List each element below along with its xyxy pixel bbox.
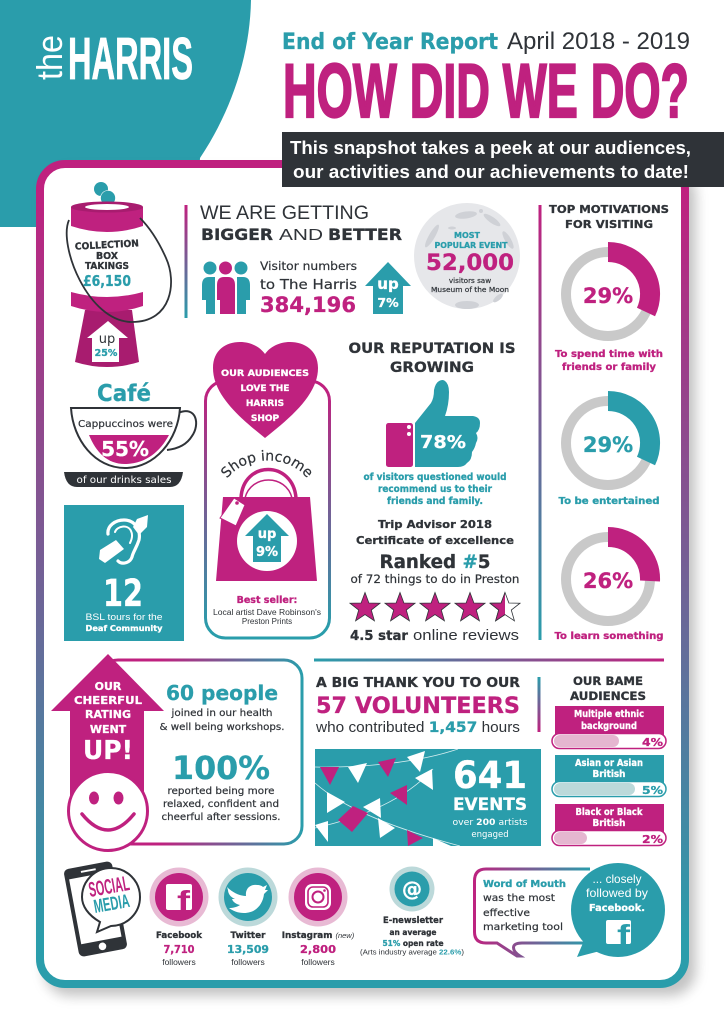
arrow up 7%: up [377, 275, 399, 293]
e-newsletter stat [360, 866, 464, 956]
reputation text [364, 472, 506, 507]
workshops text: cheerful after sessions. [162, 812, 280, 823]
box label: COLLECTION [75, 238, 139, 253]
facebook stat: 7,710 [164, 943, 195, 956]
volunteers text: 57 VOLUNTEERS [316, 694, 520, 719]
moon: most popular event: 52,000 [426, 251, 514, 276]
heading [549, 203, 669, 231]
online reviews [350, 627, 519, 644]
donut 26% learn: 26% [583, 569, 633, 593]
intro banner [282, 132, 724, 187]
panel: cheerful rating [51, 654, 302, 850]
bar: asian: 5% [642, 784, 663, 797]
bar: black: 2% [642, 833, 663, 846]
box label [75, 238, 139, 290]
heading: FOR VISITING [565, 218, 653, 231]
donut 26% learn [554, 537, 664, 642]
callout: facebook: ... closely [592, 872, 642, 886]
events text: 641 [453, 754, 527, 797]
BSL panel: BSL tours for the [86, 612, 162, 623]
twitter stat: 13,509 [227, 943, 269, 956]
arrow up 25%: 25% [95, 348, 118, 359]
events text: engaged [471, 830, 509, 840]
intro banner: This snapshot takes a peek at our audiences, [290, 138, 691, 158]
arrow [51, 654, 164, 800]
instagram stat [282, 868, 355, 967]
workshops text [160, 681, 284, 823]
divider [538, 677, 540, 732]
logo: the Harris [29, 26, 193, 92]
icon: hearing loop [99, 515, 148, 563]
intro banner: our activities and our achievements to date! [293, 162, 689, 182]
facebook stat: followers [162, 957, 196, 967]
heart text: OUR AUDIENCES [221, 369, 309, 379]
e-newsletter stat: an average [390, 928, 436, 937]
cafe panel: Café [97, 381, 151, 407]
moon: most popular event: MOST [454, 231, 481, 240]
reputation text: of visitors questioned would [364, 472, 506, 483]
bar: asian: Asian or Asian [575, 758, 643, 769]
icon: smiley [68, 772, 148, 850]
moon: most popular event: Museum of the Moon [431, 285, 509, 294]
icon: phone with social media bubble: MEDIA [92, 891, 131, 918]
workshops text: joined in our health [170, 708, 272, 719]
best seller: Best seller: [237, 595, 297, 606]
donut 29% friends: friends or family [562, 362, 657, 373]
heading: bigger and better [200, 202, 402, 244]
heart text: LOVE THE [241, 384, 289, 394]
donut 29% friends [555, 252, 663, 373]
bar: black: Black or Black [576, 807, 643, 818]
callout: word of mouth: effective [483, 908, 530, 919]
twitter stat: Twitter [231, 931, 266, 941]
moon: most popular event: POPULAR EVENT [434, 241, 508, 250]
moon: most popular event [414, 203, 520, 309]
heading: TOP MOTIVATIONS [549, 203, 669, 216]
divider [538, 205, 542, 640]
visitor numbers: Visitor numbers [260, 259, 357, 273]
box foot [75, 310, 139, 367]
heading [570, 674, 646, 703]
cafe panel [64, 381, 196, 487]
donut 29% friends: To spend time with [555, 349, 663, 360]
panel: shop [204, 342, 331, 640]
panel: events [315, 749, 541, 850]
twitter stat [218, 868, 278, 967]
box strap [67, 218, 171, 322]
icon: visitors [202, 262, 250, 314]
events text: over 200 artists [452, 818, 528, 828]
trip advisor: Trip Advisor 2018 [378, 518, 492, 531]
icon: shopping bag: 9% [256, 545, 278, 560]
heading: bigger and better: BETTER [328, 225, 402, 244]
visitor numbers: to The Harris [260, 278, 357, 293]
callout: word of mouth: Word of Mouth [483, 879, 566, 890]
logo: the Harris: HARRIS [68, 26, 193, 92]
bar: asian [552, 755, 666, 797]
donut 29% friends: 29% [583, 284, 633, 308]
heart text: HARRIS [246, 399, 284, 409]
box label: BOX [96, 251, 119, 262]
callout: facebook [571, 863, 665, 957]
donut 29% entertained: 29% [583, 433, 633, 457]
e-newsletter stat: 51% open rate [382, 939, 444, 948]
heading: reputation: GROWING [390, 360, 474, 376]
callout: word of mouth: was the most [483, 893, 555, 904]
trip advisor [350, 518, 520, 586]
callout: word of mouth: marketing tool [483, 922, 563, 933]
workshops text: 60 people [166, 681, 278, 705]
workshops text: & well being workshops. [160, 722, 284, 733]
workshops text: relaxed, confident and [163, 799, 279, 810]
facebook stat [150, 868, 208, 967]
cafe panel: Cappuccinos were [78, 419, 173, 430]
icon: coins [94, 182, 116, 206]
trip advisor: of 72 things to do in Preston [350, 572, 520, 586]
instagram stat: Instagram (new) [282, 931, 355, 941]
events text [452, 754, 528, 840]
divider [184, 205, 188, 318]
bar: multiple ethnic: 4% [642, 736, 663, 749]
teal header shape [0, 0, 251, 227]
heading: bigger and better: WE ARE GETTING [200, 202, 369, 224]
online reviews: 4.5 star [350, 629, 409, 644]
arrow text: WENT [90, 723, 127, 736]
heading: bigger and better: AND [279, 227, 323, 244]
panel: top motivations [549, 203, 669, 642]
volunteers text: who contributed 1,457 hours [315, 720, 520, 736]
bar: black: British [592, 818, 626, 829]
icon: shopping bag [216, 470, 317, 581]
panel: BAME audiences [552, 674, 666, 846]
icon: shopping bag: up [258, 527, 276, 542]
bar: multiple ethnic: Multiple ethnic [574, 709, 644, 720]
icon: cup [71, 408, 196, 468]
box body [71, 207, 143, 300]
report subtitle: End of Year Report [282, 30, 498, 55]
facebook stat: Facebook [156, 931, 203, 941]
trip advisor: Ranked #5 [380, 551, 490, 573]
twitter stat: followers [231, 957, 265, 967]
donut 26% learn: To learn something [554, 631, 664, 642]
arrow text: OUR [95, 680, 122, 693]
box lid and base bands [71, 202, 143, 312]
report subtitle: April 2018 - 2019 [507, 28, 690, 55]
heading: OUR BAME [573, 674, 643, 688]
moon: most popular event: visitors saw [449, 276, 491, 285]
heart text: SHOP [251, 414, 280, 424]
workshops text: 100% [172, 749, 270, 787]
volunteers text: A BIG THANK YOU TO OUR [316, 675, 521, 691]
heading: AUDIENCES [570, 689, 646, 703]
box label: TAKINGS [85, 261, 129, 272]
workshops text: reported being more [168, 786, 275, 797]
callout: word of mouth [474, 869, 590, 956]
best seller: Preston Prints [242, 617, 292, 626]
divider [314, 658, 664, 662]
icon: phone with social media bubble [63, 861, 140, 957]
arrow up 7%: 7% [377, 295, 399, 310]
bunting [315, 749, 460, 850]
e-newsletter stat: @ [402, 877, 422, 901]
bar: black [552, 804, 666, 846]
instagram stat: followers [301, 957, 335, 967]
arrow up 7% [365, 262, 411, 314]
arrow text: RATING [85, 708, 131, 721]
icon: heart [213, 342, 318, 438]
curved label: shop income: Shop income [221, 450, 312, 478]
instagram stat: 2,800 [300, 943, 336, 956]
heading: reputation [348, 341, 516, 376]
reputation text: recommend us to their [378, 484, 492, 495]
bar: multiple ethnic: background [581, 721, 637, 732]
callout: facebook: Facebook. [589, 903, 645, 914]
visitor numbers: 384,196 [260, 293, 356, 317]
heading: reputation: OUR REPUTATION IS [348, 341, 516, 357]
best seller [213, 595, 321, 626]
heart text [221, 369, 309, 424]
visitor numbers [260, 259, 357, 317]
star rating [350, 592, 520, 621]
logo: the Harris: the [29, 35, 70, 80]
main frame [40, 164, 696, 996]
heading: bigger and better: BIGGER [201, 225, 273, 244]
callout: facebook: followed by [586, 886, 648, 900]
events text: EVENTS [453, 795, 527, 815]
icon: thumbs up 78%: 78% [420, 432, 466, 453]
icon: thumbs up 78% [386, 380, 480, 467]
arrow up 25%: up [99, 332, 115, 347]
report subtitle [282, 28, 690, 55]
BSL panel: 12 [103, 572, 143, 615]
drinks sales pill: of our drinks sales [76, 475, 172, 486]
box label: £6,150 [83, 272, 131, 290]
arrow text [74, 680, 142, 766]
BSL panel: Deaf Community [86, 623, 163, 633]
arrow text: CHEERFUL [74, 694, 142, 707]
callout: facebook: f [617, 919, 631, 950]
collection box [67, 182, 171, 367]
reputation text: friends and family. [387, 496, 483, 507]
online reviews: online reviews [413, 627, 519, 644]
BSL panel [64, 505, 184, 641]
icon: phone with social media bubble: SOCIAL [87, 872, 131, 902]
arrow up 25% [87, 321, 128, 362]
arrow text: UP! [83, 736, 133, 766]
bar: asian: British [592, 769, 626, 780]
e-newsletter stat: E-newsletter [383, 916, 444, 926]
trip advisor: Certificate of excellence [356, 534, 514, 547]
e-newsletter stat: (Arts industry average 22.6% ) [360, 950, 464, 956]
volunteers text [315, 675, 521, 736]
best seller: Local artist Dave Robinson's [213, 608, 321, 617]
cafe panel: 55% [101, 437, 149, 461]
donut 29% entertained: To be entertained [558, 496, 660, 507]
icon: facebook: f [177, 885, 191, 916]
icon: twitter bird [227, 885, 268, 913]
icon: instagram [305, 884, 331, 910]
bar: multiple ethnic [552, 706, 666, 749]
donut 29% entertained [558, 401, 660, 507]
